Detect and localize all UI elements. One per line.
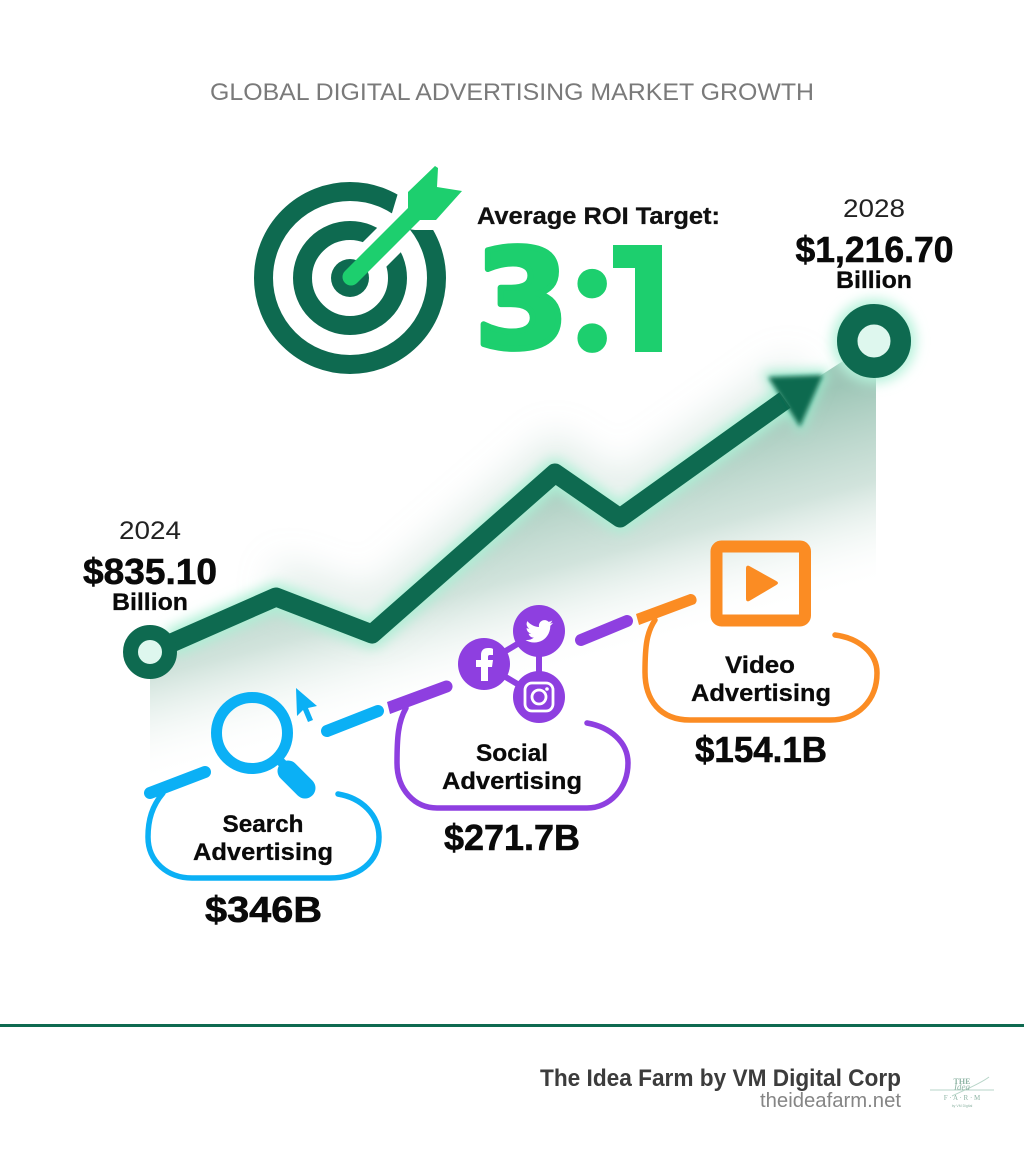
- footer rule: [0, 1024, 1024, 1027]
- icon: cursor: [296, 688, 317, 722]
- chart: growth line: [130, 299, 916, 800]
- label: Advertising: [691, 680, 831, 707]
- value: $154.1B: [695, 729, 827, 770]
- footer: logo: by VM Digital: [952, 1104, 973, 1108]
- dash: [150, 772, 205, 793]
- label: Advertising: [442, 768, 582, 795]
- footer: logo: F · A · R · M: [944, 1094, 981, 1102]
- label: 2024 value: 2024: [119, 517, 181, 545]
- panel: search advertising: [148, 688, 379, 930]
- footer: logo: Idea: [953, 1082, 970, 1092]
- label: [193, 811, 333, 866]
- icon: target with arrow: [264, 166, 462, 364]
- label: [691, 652, 831, 707]
- label: 2024 value: [83, 517, 217, 616]
- chart haze: [276, 372, 800, 612]
- dash: [581, 621, 627, 640]
- icon: video player: [716, 546, 805, 620]
- label: Advertising: [193, 839, 333, 866]
- label: 2028 value: 2028: [843, 195, 905, 223]
- label: 2028 value: $1,216.70: [796, 229, 954, 270]
- arrowhead: [768, 375, 823, 427]
- end marker 2028: [847, 314, 901, 368]
- dash: [387, 680, 453, 714]
- label: [442, 740, 582, 795]
- label: Social: [476, 740, 548, 767]
- footer: website: theideafarm.net: [760, 1090, 901, 1112]
- stat: 3:1: :: [564, 198, 621, 386]
- label: average ROI target: Average ROI Target:: [477, 203, 720, 230]
- title: GLOBAL DIGITAL ADVERTISING MARKET GROWTH: [210, 79, 814, 106]
- dash: [327, 711, 378, 731]
- dash: [636, 594, 697, 625]
- footer: brand name: The Idea Farm by VM Digital Corp: [540, 1065, 901, 1092]
- footer: logo: THE: [954, 1077, 970, 1086]
- footer: logo: [930, 1077, 994, 1108]
- value: $346B: [205, 889, 322, 930]
- stat: 3:1: 3: [474, 222, 569, 380]
- stat: 3:1: [480, 243, 662, 353]
- outline: [397, 708, 628, 808]
- panel: video advertising: [636, 546, 877, 770]
- outline: [645, 620, 877, 720]
- value: $271.7B: [444, 817, 580, 858]
- icon: social network: [458, 605, 565, 723]
- stat: 3:1: 1: [596, 218, 696, 386]
- start marker 2024: [130, 632, 170, 672]
- icon: magnifying glass: [216, 698, 305, 788]
- label: 2024 value: $835.10: [83, 551, 217, 592]
- outline: [148, 793, 379, 878]
- label: 2028 value: [796, 195, 954, 294]
- label: Search: [222, 811, 304, 838]
- label: 2024 value: Billion: [112, 589, 188, 616]
- panel: social advertising: [387, 605, 628, 858]
- label: Video: [725, 652, 795, 679]
- chart line glow: [170, 299, 916, 643]
- chart line: [160, 400, 785, 648]
- label: 2028 value: Billion: [836, 267, 912, 294]
- chart area fill: [150, 341, 876, 800]
